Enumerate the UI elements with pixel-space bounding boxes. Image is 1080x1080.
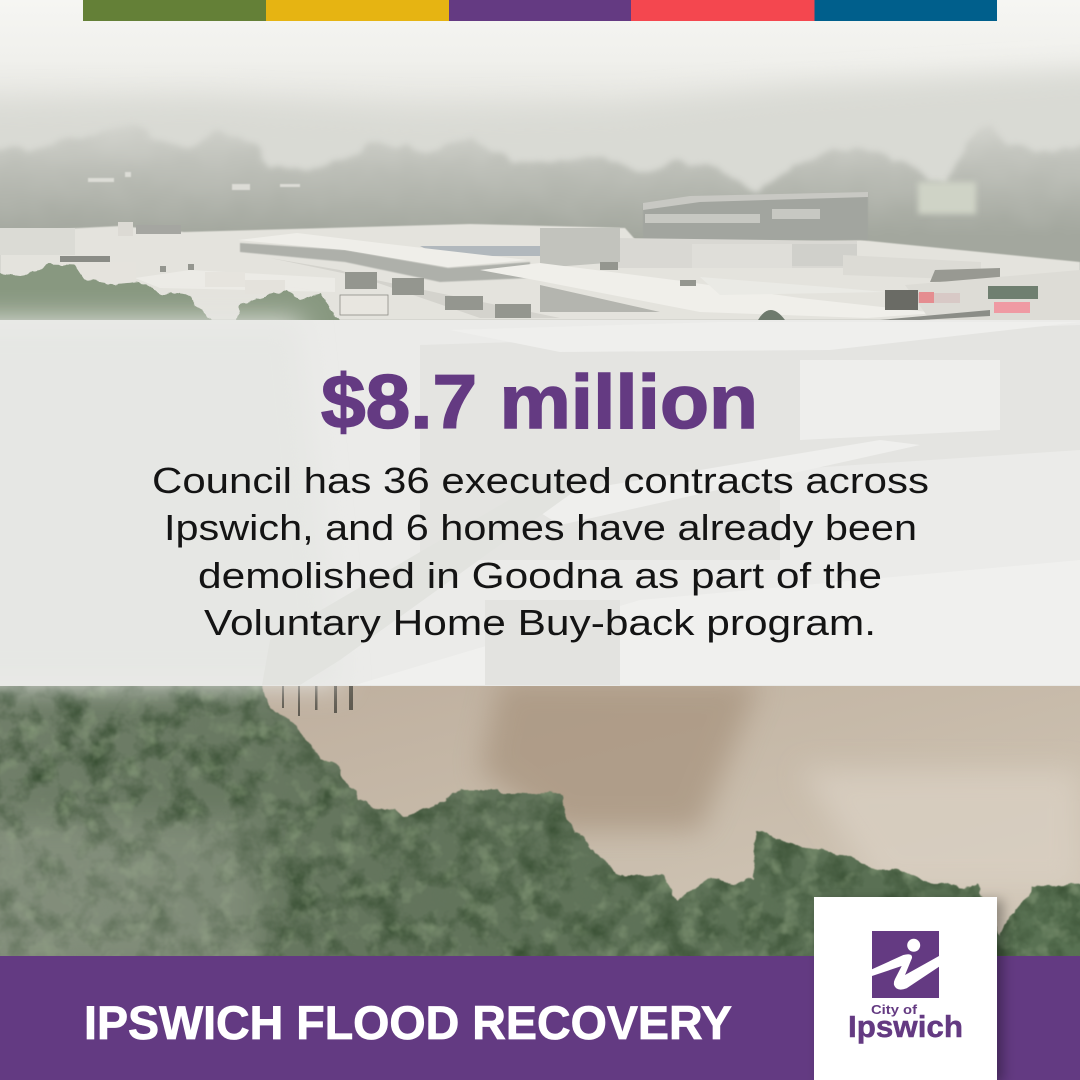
river xyxy=(0,686,1080,956)
text block: contract details: demolished in Goodna as part of the xyxy=(198,555,882,596)
text block: contract details: Council has 36 executed contracts across xyxy=(152,460,929,501)
footer band xyxy=(0,956,1080,1080)
logo text: City of: City of xyxy=(871,1002,918,1017)
rooftop buildings xyxy=(0,192,1080,320)
footer title: IPSWICH FLOOD RECOVERY xyxy=(84,996,732,1049)
faint trees and building seen through the panel xyxy=(0,320,1080,685)
logo text: Ipswich: Ipswich xyxy=(848,1009,963,1044)
shop signs xyxy=(885,290,918,310)
mid-ground trees xyxy=(0,124,1080,330)
text block: contract details xyxy=(152,460,929,643)
colour bar xyxy=(83,0,997,21)
text block: contract details: Ipswich, and 6 homes have already been xyxy=(164,507,917,548)
heading: $8.7 million: $8.7 million xyxy=(321,360,758,445)
distant hazy hills xyxy=(0,66,1080,126)
text block: contract details: Voluntary Home Buy-back program. xyxy=(204,602,876,643)
top-left foreground trees xyxy=(0,263,340,320)
riverbank trees xyxy=(0,686,1080,956)
small white houses among trees xyxy=(88,172,300,190)
icon: Ipswich logo mark xyxy=(872,931,939,998)
logo card: City of Ipswich xyxy=(814,897,997,1080)
panel: translucent statistic panel xyxy=(0,320,1080,685)
pier posts xyxy=(282,686,353,716)
long rooftops xyxy=(240,243,530,282)
rooftop air-conditioning units xyxy=(160,262,696,318)
